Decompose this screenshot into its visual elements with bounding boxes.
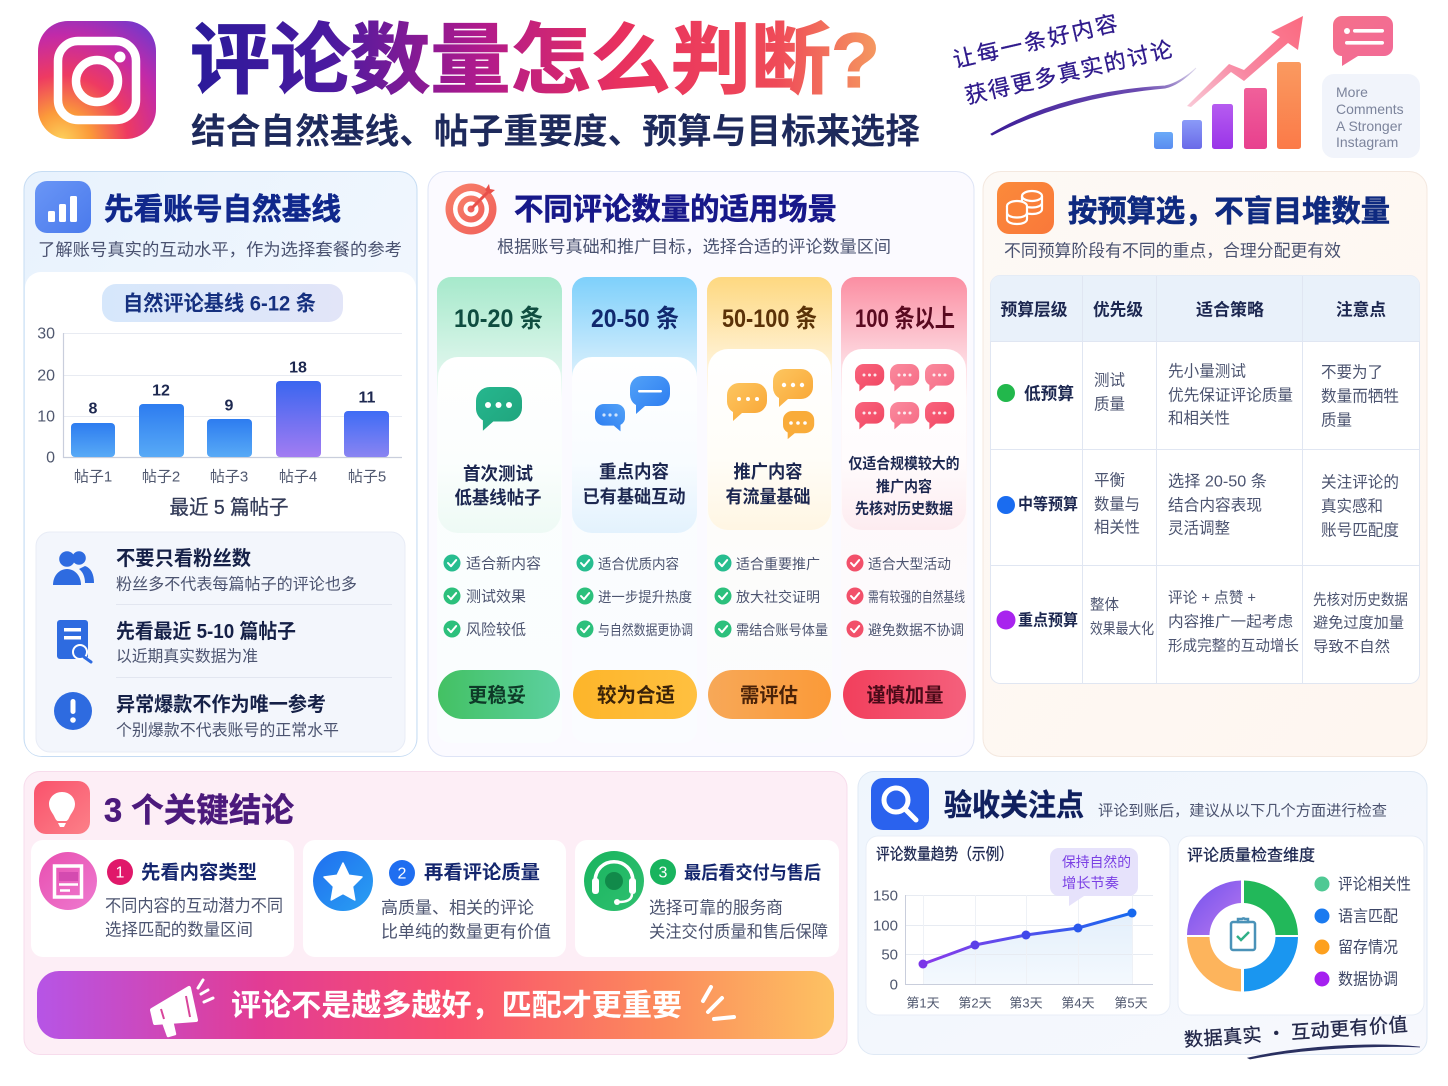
scenario card: 重点内容 bbox=[599, 461, 669, 482]
heading: 不同评论数量的适用场景 bbox=[514, 194, 837, 226]
icon: star bbox=[313, 851, 373, 911]
column: 20-50 bbox=[572, 277, 697, 743]
bar chart: 30 bbox=[37, 326, 55, 342]
trend line chart: 0 bbox=[890, 976, 898, 994]
row: low budget: 质量 bbox=[1094, 396, 1125, 414]
more comments tag: More bbox=[1336, 84, 1368, 100]
tip 2 text: 以近期真实数据为准 bbox=[116, 648, 258, 666]
scenario card: 推广内容 bbox=[734, 461, 802, 482]
icon: document search bbox=[57, 620, 91, 662]
verdict pill: 谨慎加量 bbox=[866, 684, 944, 707]
icon: coins bbox=[997, 182, 1054, 234]
row: key budget: 避免过度加量 bbox=[1313, 614, 1404, 632]
bar chart: 帖子1 bbox=[74, 468, 112, 486]
row: key budget: 先核对历史数据 bbox=[1313, 592, 1408, 608]
row: low budget: 优先保证评论质量 bbox=[1168, 386, 1293, 404]
row: low budget: 测试 bbox=[1094, 372, 1125, 390]
quality donut card: 评论质量检查维度 bbox=[1187, 846, 1315, 864]
icon: two bubbles bbox=[595, 376, 670, 431]
row: key budget: 导致不自然 bbox=[1313, 638, 1390, 656]
bar chart: 最近 5 篇帖子 bbox=[170, 496, 288, 519]
checklist: 需结合账号体量 bbox=[736, 622, 828, 638]
icon: single bubble bbox=[476, 387, 522, 431]
tip 3 text bbox=[116, 692, 339, 740]
checklist: 与自然数据更协调 bbox=[598, 622, 693, 638]
panel subtitle: 评论到账后，建议从以下几个方面进行检查 bbox=[1098, 802, 1387, 820]
range heading: 20-50 条 bbox=[591, 305, 679, 333]
icon: headset bbox=[584, 851, 644, 911]
donut legend: 评论相关性 bbox=[1338, 876, 1411, 894]
bar chart: 8 bbox=[89, 400, 98, 418]
row: low budget: 先小量测试 bbox=[1168, 362, 1246, 380]
verdict pill bbox=[438, 670, 560, 719]
handwritten closing note: 数据真实 · 互动更有价值 bbox=[1183, 1010, 1408, 1052]
baseline badge: 自然评论基线 6-12 条 bbox=[123, 292, 316, 316]
row: key budget: 重点预算 bbox=[1018, 610, 1078, 630]
sparkle accent bbox=[703, 987, 734, 1019]
conclusion card 1: 1 bbox=[116, 864, 125, 882]
panel subtitle: 不同预算阶段有不同的重点，合理分配更有效 bbox=[1004, 242, 1341, 260]
icon: magnifier bbox=[871, 778, 929, 830]
checklist: 需有较强的自然基线 bbox=[868, 589, 965, 605]
row: mid budget: 关注评论的 bbox=[1321, 474, 1399, 492]
bar chart: 帖子3 bbox=[210, 468, 248, 486]
icon: three bubbles bbox=[727, 369, 814, 439]
checklist: 适合重要推广 bbox=[736, 556, 820, 572]
banner bbox=[37, 971, 834, 1039]
checklist: 风险较低 bbox=[466, 620, 526, 638]
row: key budget: 评论 + 点赞 + bbox=[1168, 590, 1256, 606]
checklist: 适合新内容 bbox=[466, 556, 541, 572]
trend line chart: 第3天 bbox=[1009, 996, 1043, 1010]
callout: 保持自然的 bbox=[1062, 854, 1131, 870]
quality donut card bbox=[1178, 836, 1424, 1015]
scenario card bbox=[842, 349, 966, 530]
donut legend bbox=[1314, 876, 1411, 988]
verdict pill: 更稳妥 bbox=[468, 684, 526, 707]
scenario card bbox=[438, 357, 561, 533]
row: low budget: 数量而牺牲 bbox=[1321, 388, 1399, 406]
more comments tag bbox=[1322, 74, 1420, 158]
scenario card: 低基线帖子 bbox=[454, 488, 542, 508]
checklist: 测试效果 bbox=[466, 588, 526, 606]
table header: 预算层级 bbox=[1000, 300, 1068, 320]
checklist: 进一步提升热度 bbox=[598, 589, 692, 605]
row: key budget bbox=[996, 590, 1408, 656]
heading: 3 个关键结论 bbox=[104, 792, 294, 828]
conclusion card 3: 关注交付质量和售后保障 bbox=[649, 922, 828, 942]
table header bbox=[1000, 300, 1386, 320]
banner: 评论不是越多越好，匹配才更重要 bbox=[231, 990, 682, 1022]
trend line chart: 第2天 bbox=[958, 996, 992, 1010]
range heading: 10-20 条 bbox=[454, 305, 543, 333]
donut legend: 语言匹配 bbox=[1338, 908, 1398, 926]
bar chart: 9 bbox=[225, 398, 234, 414]
tip 3 text: 个别爆款不代表账号的正常水平 bbox=[116, 720, 339, 740]
table header: 优先级 bbox=[1093, 300, 1143, 320]
checklist bbox=[714, 554, 828, 638]
trend line chart bbox=[866, 836, 1170, 1015]
conclusion card 1: 选择匹配的数量区间 bbox=[105, 920, 253, 940]
tips box bbox=[36, 532, 405, 752]
scenario card: 已有基础互动 bbox=[582, 487, 686, 507]
icon: people bbox=[53, 551, 94, 585]
table header: 适合策略 bbox=[1196, 300, 1264, 320]
tip 1 text: 粉丝多不代表每篇帖子的评论也多 bbox=[116, 576, 357, 594]
icon: content bbox=[39, 852, 97, 910]
icon: bar chart bbox=[35, 181, 91, 233]
row: mid budget bbox=[997, 472, 1399, 540]
bar chart bbox=[37, 326, 402, 519]
row: mid budget: 结合内容表现 bbox=[1168, 496, 1262, 514]
subtitle: 结合自然基线、帖子重要度、预算与目标来选择 bbox=[191, 112, 920, 152]
trend line chart: 150 bbox=[873, 888, 898, 904]
donut chart bbox=[1187, 880, 1298, 992]
checklist bbox=[576, 554, 693, 638]
column: 10-20 bbox=[437, 277, 562, 743]
panel: 3 key conclusions bbox=[24, 772, 847, 1054]
bar chart: 10 bbox=[37, 408, 55, 426]
row: mid budget: 账号匹配度 bbox=[1321, 522, 1399, 540]
donut legend: 留存情况 bbox=[1338, 938, 1398, 956]
conclusion card 1: 不同内容的互动潜力不同 bbox=[105, 896, 283, 916]
panel: acceptance focus bbox=[858, 772, 1427, 1059]
bar chart: 18 bbox=[289, 360, 307, 376]
row: low budget: 低预算 bbox=[1024, 384, 1074, 404]
checklist: 适合优质内容 bbox=[598, 556, 679, 572]
icon: speech bubble bbox=[1333, 16, 1393, 66]
checklist: 避免数据不协调 bbox=[868, 622, 964, 638]
icon: clipboard bbox=[1231, 918, 1255, 950]
callout bbox=[1050, 848, 1138, 906]
row: low budget bbox=[997, 362, 1399, 430]
growth bar chart illustration bbox=[1154, 62, 1301, 149]
conclusion card 3: 3 bbox=[659, 864, 668, 882]
panel: comment count scenarios bbox=[428, 172, 974, 756]
handwritten underline swoosh bbox=[991, 68, 1196, 135]
heading: 验收关注点 bbox=[944, 790, 1084, 822]
handwritten slogan: 获得更多真实的讨论 bbox=[961, 32, 1175, 111]
row: key budget: 整体 bbox=[1090, 596, 1119, 614]
scenario card: 首次测试 bbox=[463, 464, 533, 484]
panel: natural baseline bbox=[24, 172, 417, 756]
conclusion card 3: 选择可靠的服务商 bbox=[649, 898, 783, 918]
row: mid budget: 选择 20-50 条 bbox=[1168, 472, 1267, 490]
growth arrow bbox=[1187, 16, 1303, 107]
icon: light bulb bbox=[34, 781, 90, 834]
row: mid budget: 中等预算 bbox=[1018, 494, 1078, 514]
trend line chart: 50 bbox=[881, 946, 898, 964]
row: mid budget: 平衡 bbox=[1094, 472, 1125, 490]
row: key budget: 形成完整的互动增长 bbox=[1168, 638, 1299, 654]
bar chart: 帖子4 bbox=[279, 468, 317, 486]
tip 2 text bbox=[116, 620, 296, 666]
checklist bbox=[444, 554, 541, 638]
icon: target bbox=[446, 184, 496, 234]
trend line chart: 第1天 bbox=[906, 996, 940, 1010]
tip 1 text: 不要只看粉丝数 bbox=[116, 547, 251, 570]
scenario card bbox=[708, 349, 831, 530]
column: 50-100 bbox=[707, 277, 832, 743]
bar chart: 11 bbox=[359, 390, 376, 406]
conclusion card 2: 高质量、相关的评论 bbox=[381, 898, 534, 918]
verdict pill: 较为合适 bbox=[597, 683, 675, 707]
row: mid budget: 灵活调整 bbox=[1168, 520, 1230, 538]
more comments tag: A Stronger bbox=[1336, 118, 1402, 134]
conclusion card 1: 先看内容类型 bbox=[141, 860, 257, 884]
callout: 增长节奏 bbox=[1062, 875, 1119, 891]
row: low budget: 质量 bbox=[1321, 412, 1352, 430]
closing underline bbox=[1248, 1045, 1420, 1059]
conclusion card 2: 再看评论质量 bbox=[424, 860, 540, 884]
range heading: 50-100 条 bbox=[722, 305, 817, 333]
heading: 先看账号自然基线 bbox=[104, 194, 341, 226]
bar chart: 0 bbox=[46, 450, 55, 466]
row: low budget: 和相关性 bbox=[1168, 410, 1230, 428]
verdict pill: 需评估 bbox=[740, 684, 798, 707]
range heading: 100 条以上 bbox=[855, 305, 955, 333]
tip 1 text bbox=[116, 547, 357, 594]
baseline badge bbox=[102, 284, 343, 322]
row: mid budget: 数量与 bbox=[1094, 496, 1140, 514]
bar chart: 帖子5 bbox=[348, 468, 386, 486]
row: key budget: 内容推广一起考虑 bbox=[1168, 614, 1293, 630]
heading: 按预算选，不盲目堆数量 bbox=[1068, 196, 1390, 228]
scenario card: 仅适合规模较大的 bbox=[848, 454, 960, 472]
verdict pill bbox=[573, 670, 697, 719]
scenario card: 有流量基础 bbox=[726, 487, 810, 507]
row: mid budget: 真实感和 bbox=[1321, 498, 1383, 516]
verdict pill bbox=[708, 670, 831, 719]
panel: budget bbox=[983, 172, 1427, 756]
conclusion card 2: 2 bbox=[398, 866, 407, 882]
scenario card bbox=[572, 357, 697, 533]
row: key budget: 效果最大化 bbox=[1090, 620, 1154, 638]
conclusion card 3: 最后看交付与售后 bbox=[684, 862, 821, 883]
row: mid budget: 相关性 bbox=[1094, 518, 1140, 536]
trend line chart: 第4天 bbox=[1061, 996, 1095, 1010]
bar chart: 12 bbox=[152, 382, 170, 400]
panel subtitle: 了解账号真实的互动水平，作为选择套餐的参考 bbox=[38, 240, 402, 260]
donut legend: 数据协调 bbox=[1338, 970, 1398, 988]
tip 2 text: 先看最近 5-10 篇帖子 bbox=[116, 620, 296, 643]
scenario card: 推广内容 bbox=[876, 478, 932, 496]
icon: six bubbles bbox=[855, 364, 954, 429]
icon: warning bbox=[54, 692, 92, 730]
trend line chart: 评论数量趋势（示例） bbox=[876, 846, 1013, 864]
conclusion card 2 bbox=[303, 840, 566, 957]
more comments tag: Comments bbox=[1336, 101, 1404, 117]
scenario card: 先核对历史数据 bbox=[855, 500, 953, 518]
trend line chart: 第5天 bbox=[1114, 996, 1148, 1010]
verdict pill bbox=[843, 670, 966, 719]
conclusion card 2: 比单纯的数量更有价值 bbox=[381, 922, 551, 942]
budget table bbox=[990, 276, 1420, 684]
row: low budget: 不要为了 bbox=[1321, 364, 1383, 382]
tip 3 text: 异常爆款不作为唯一参考 bbox=[116, 692, 326, 716]
conclusion card 1 bbox=[31, 840, 294, 957]
bar chart: 20 bbox=[37, 368, 55, 384]
trend line chart: 100 bbox=[873, 918, 898, 934]
panel subtitle: 根据账号真础和推广目标，选择合适的评论数量区间 bbox=[497, 238, 891, 256]
white chart area bbox=[25, 272, 416, 756]
instagram logo icon bbox=[38, 21, 156, 139]
table header: 注意点 bbox=[1336, 300, 1386, 320]
checklist: 适合大型活动 bbox=[868, 556, 951, 572]
checklist bbox=[846, 554, 965, 638]
icon: megaphone bbox=[152, 980, 213, 1036]
checklist: 放大社交证明 bbox=[736, 589, 820, 605]
more comments tag: Instagram bbox=[1336, 134, 1398, 150]
bar chart: 帖子2 bbox=[142, 468, 180, 486]
column: 100+ bbox=[841, 277, 967, 743]
main title: 评论数量怎么判断? bbox=[190, 18, 880, 104]
conclusion card 3 bbox=[575, 840, 839, 957]
handwritten slogan: 让每一条好内容 bbox=[949, 6, 1120, 75]
